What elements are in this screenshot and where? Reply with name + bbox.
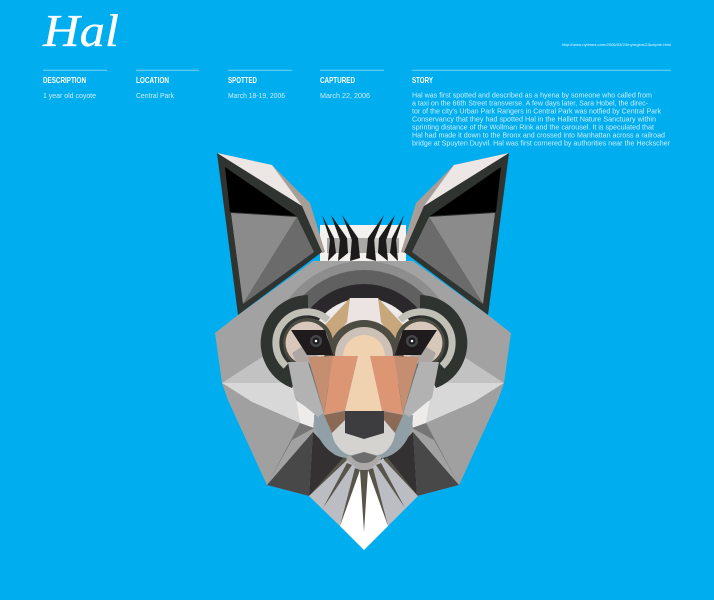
forehead band	[320, 225, 406, 262]
right half of face	[362, 153, 511, 545]
blue-grey cheek	[314, 410, 364, 458]
column: story: STORY	[412, 75, 433, 85]
eye socket	[283, 318, 333, 368]
column: story: Hal had made it down to the Bronx and crossed into Manhattan across a railroad	[412, 130, 665, 140]
eye shape	[291, 330, 333, 355]
chin	[346, 452, 382, 470]
muzzle left	[288, 356, 364, 458]
column: story: tor of the city's Urban Park Rangers in Central Park was notfied by Central Park	[412, 106, 661, 116]
ear	[217, 153, 325, 315]
column: location	[136, 70, 199, 100]
column: captured: CAPTURED	[320, 75, 355, 85]
column: spotted: SPOTTED	[228, 75, 257, 85]
spikes of fur	[322, 215, 360, 261]
column: description: 1 year old coyote	[43, 91, 96, 100]
column: captured: March 22, 2006	[320, 91, 370, 100]
left eye group	[261, 295, 333, 388]
right eye group	[395, 295, 467, 388]
column: story	[412, 70, 671, 148]
pupil	[310, 335, 322, 347]
source url: http://www.nytimes.com/2006/03/23/nyregion/23coyote.html	[562, 42, 671, 47]
column: spotted	[228, 70, 292, 100]
column: story: sprinting distance of the Wollman Rink and the carousel. It is speculated that	[412, 122, 654, 132]
snout centre	[345, 356, 382, 411]
column: description	[43, 70, 107, 100]
column: story: a taxi on the 66th Street transverse. A few days later, Sara Hobel, the direc-	[412, 98, 649, 108]
column: story: bridge at Spuyten Duyvil. Hal was first cornered by authorities near the Heckscher	[412, 138, 671, 148]
outer eye ring	[261, 295, 308, 388]
chest fan	[309, 457, 418, 550]
coyote illustration	[215, 153, 511, 550]
left half of face	[215, 153, 364, 545]
white jaw	[332, 420, 395, 455]
column: location: LOCATION	[136, 75, 169, 85]
nose bridge arch	[328, 320, 400, 356]
grey muzzle planes	[288, 362, 323, 417]
column: description: DESCRIPTION	[43, 75, 86, 85]
column: story: Hal was first spotted and described as a hyena by someone who called from	[412, 90, 652, 100]
brow blaze	[322, 298, 406, 344]
pale eye ring	[276, 312, 328, 366]
column: captured	[320, 70, 384, 100]
title: Hal	[42, 5, 119, 56]
column: story: Conservancy that they had spotted Hal in the Hallett Nature Sanctuary within	[412, 114, 656, 124]
forehead arcs	[270, 261, 458, 355]
column: location: Central Park	[136, 91, 174, 100]
muzzle right	[363, 356, 439, 458]
head side planes	[215, 261, 364, 545]
column: spotted: March 18-19, 2006	[228, 91, 285, 100]
nose	[345, 411, 384, 439]
